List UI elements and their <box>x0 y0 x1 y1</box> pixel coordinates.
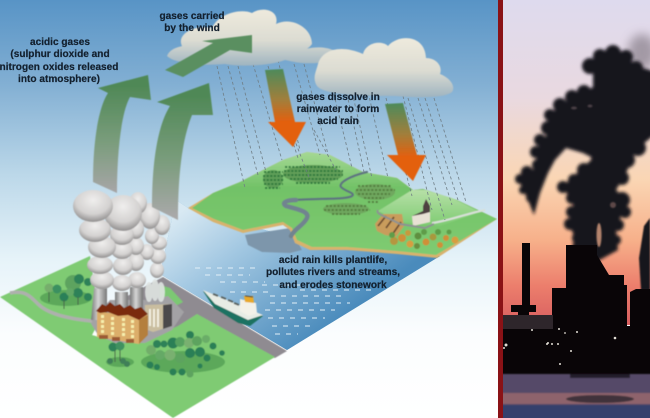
orchards on hill <box>323 184 395 215</box>
label: acidic gases: (sulphur dioxide and <box>10 49 110 60</box>
label: gases dissolve: acid rain <box>317 116 359 127</box>
distant haze building <box>503 315 553 329</box>
rain <box>217 60 466 220</box>
tall chimney <box>511 243 536 318</box>
forest shade <box>263 170 283 188</box>
label: acidic gases: into atmosphere) <box>18 74 100 85</box>
panel: acid rain diagram <box>0 0 498 418</box>
label: gases dissolve: gases dissolve in <box>296 92 380 103</box>
chimney 2 <box>115 292 128 309</box>
smokestacks <box>91 287 143 320</box>
hills and shore <box>188 152 497 258</box>
main plume <box>515 45 650 262</box>
isometric ground <box>0 152 497 418</box>
polluted estuary <box>245 228 302 253</box>
right plume <box>639 218 650 290</box>
factory silhouette <box>503 243 650 376</box>
village trees <box>389 229 458 249</box>
label: acid rain effects: and erodes stonework <box>279 280 387 291</box>
river upper <box>295 172 367 200</box>
label: acid rain effects: acid rain kills plantlife, <box>279 255 387 266</box>
village <box>375 199 485 249</box>
forest shadow <box>141 351 225 373</box>
river lower <box>284 200 307 236</box>
industrial smoke plumes <box>73 190 170 302</box>
label: gases carried: by the wind <box>164 23 220 34</box>
second hill <box>378 190 480 226</box>
photo sky <box>503 0 650 325</box>
photo smoke <box>515 34 650 290</box>
small grass patch <box>160 285 183 308</box>
water <box>160 200 440 350</box>
arrow: acid rain falling right <box>385 103 426 181</box>
plume 1 <box>73 190 116 289</box>
label: acid rain effects: pollutes rivers and streams, <box>266 267 400 278</box>
sky gaps in plume <box>571 104 616 247</box>
label: acidic gases: acidic gases <box>30 37 90 48</box>
water ripples <box>195 268 375 334</box>
upper wisp <box>628 34 650 70</box>
base <box>503 326 650 376</box>
left forest <box>40 274 92 309</box>
factory lights <box>503 328 616 365</box>
arrow: rising gas left <box>93 75 151 193</box>
cloud: left <box>167 10 338 66</box>
houses <box>375 214 404 237</box>
arrow: rising gas right <box>152 83 213 220</box>
photo water <box>495 374 650 418</box>
water base <box>160 200 440 350</box>
chimney 3 <box>130 287 143 309</box>
main block <box>552 245 627 335</box>
church <box>412 199 430 226</box>
main factory building <box>96 302 148 344</box>
lower forest <box>106 331 225 378</box>
forest shadow <box>40 290 92 306</box>
cargo ship <box>203 290 263 326</box>
road <box>120 277 287 358</box>
sky background <box>0 0 498 418</box>
forest on hill <box>263 165 343 188</box>
factory windows <box>101 315 134 338</box>
label: gases carried: gases carried <box>159 11 225 22</box>
plaza <box>90 296 184 343</box>
panel: factory photo <box>495 0 650 418</box>
land with sand <box>188 152 497 258</box>
chimney 1 <box>91 288 107 320</box>
divider bar <box>498 0 503 418</box>
cloud: right <box>315 38 453 97</box>
path <box>10 292 92 321</box>
label: acidic gases: nitrogen oxides released <box>0 62 118 73</box>
label: gases dissolve: rainwater to form <box>297 104 379 115</box>
village road <box>432 210 485 223</box>
steam from small stacks <box>145 279 165 302</box>
right block <box>630 289 650 326</box>
grass foreground <box>0 256 275 418</box>
village grey lane <box>377 210 434 228</box>
arrow: acid rain falling left <box>265 69 306 147</box>
plume 3 <box>128 192 147 288</box>
plume 2 <box>104 195 142 291</box>
grey factory wing <box>145 304 172 332</box>
factory roof <box>96 302 148 320</box>
plume 4 <box>140 203 170 278</box>
arrow: gases carried by wind <box>165 35 252 77</box>
green hills <box>192 152 497 255</box>
orchard shade <box>355 184 395 200</box>
